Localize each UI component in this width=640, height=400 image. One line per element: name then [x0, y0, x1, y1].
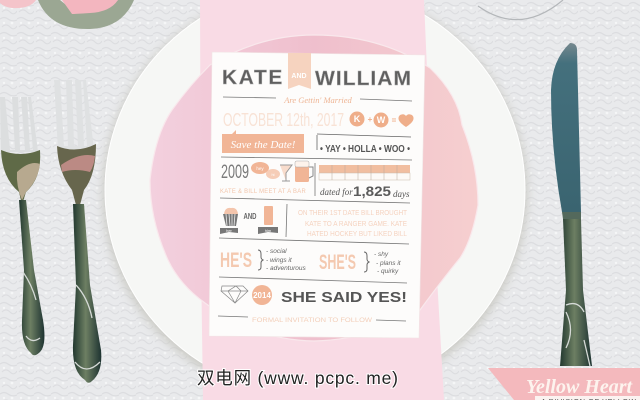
story paragraph: KATE TO A RANGER GAME. KATE — [305, 219, 407, 228]
caption: Kate and Bill meet at a bar: KATE & BILL MEET AT A BAR — [220, 188, 306, 195]
initials equation K + W = heart: + — [368, 115, 373, 124]
year badge 2014: 2014 — [253, 291, 271, 300]
he's list: - adventurous — [266, 265, 306, 272]
save the date tag: Save the Date! — [231, 139, 296, 151]
pink napkin — [200, 0, 444, 400]
subtitle: are gettin' married: Are Gettin' Married — [283, 95, 353, 105]
corner ribbon: Yellow Heart — [488, 368, 640, 400]
story paragraph: HATED HOCKEY BUT LIKED BILL — [307, 229, 407, 238]
year badge 2014 — [252, 285, 272, 305]
watermark: 双电网 (www. pcpc. me) — [197, 368, 398, 388]
right fork — [54, 80, 101, 383]
story paragraph — [298, 208, 407, 238]
pink salad plate with scalloped rim — [150, 35, 478, 341]
and text: AND — [244, 211, 256, 221]
icon: beer mug — [295, 161, 313, 182]
wine glass base top right — [478, 0, 563, 20]
invitation card — [209, 52, 425, 338]
year 2009 and speech bubbles: hi — [271, 172, 275, 177]
icon: soda with him tag — [258, 206, 278, 234]
icon: popcorn with her tag: her — [226, 228, 233, 233]
subtitle: are gettin' married — [223, 95, 412, 105]
banner: and: AND — [291, 73, 307, 80]
icon: soda with him tag: him — [265, 228, 272, 233]
formal invitation footer — [218, 316, 406, 324]
calendar strip — [319, 165, 410, 180]
corner ribbon: Yellow Heart: Yellow Heart — [526, 376, 634, 398]
rose centrepiece top left — [0, 0, 134, 29]
initials equation K + W = heart — [350, 112, 414, 128]
formal invitation footer: FORMAL INVITATION TO FOLLOW — [252, 317, 373, 324]
she's list: SHE'S — [319, 251, 356, 274]
white dinner plate — [103, 0, 527, 400]
yay holla woo — [317, 134, 411, 155]
yay holla woo: • YAY • HOLLA • WOO • — [320, 143, 410, 155]
he's list: - social — [266, 248, 287, 255]
left fork — [0, 97, 44, 355]
initials equation K + W = heart: K — [354, 114, 361, 124]
she said yes: SHE SAID YES! — [281, 289, 407, 306]
save the date tag — [222, 130, 304, 153]
heading: Kate: KATE — [222, 67, 284, 89]
date line: OCTOBER 12th, 2017 — [223, 110, 344, 130]
icon: martini glass — [280, 165, 292, 181]
year 2009 and speech bubbles: 2009 — [221, 162, 249, 183]
she's list: - plans it — [376, 260, 402, 267]
dated for 1,825 days: dated for — [320, 187, 353, 197]
dated for 1,825 days: days — [393, 189, 410, 199]
initials equation K + W = heart: W — [377, 115, 386, 125]
he's list: HE'S — [220, 249, 252, 272]
year 2009 and speech bubbles: hey — [256, 166, 264, 171]
knife — [551, 43, 592, 366]
story paragraph: ON THEIR 1ST DATE BILL BROUGHT — [298, 208, 407, 217]
icon: popcorn with her tag — [220, 208, 238, 234]
he's list: - wings it — [266, 257, 293, 264]
dated for 1,825 days: 1,825 — [353, 183, 391, 199]
he's list — [220, 248, 306, 272]
dated for 1,825 days — [320, 183, 410, 199]
icon: diamond — [221, 286, 248, 303]
she's list: - shy — [374, 251, 389, 258]
initials equation K + W = heart: = — [392, 116, 397, 125]
banner: and — [288, 53, 311, 89]
she's list: - quirky — [377, 268, 399, 275]
icon: heart — [398, 114, 414, 127]
heading: William: WILLIAM — [315, 68, 412, 90]
